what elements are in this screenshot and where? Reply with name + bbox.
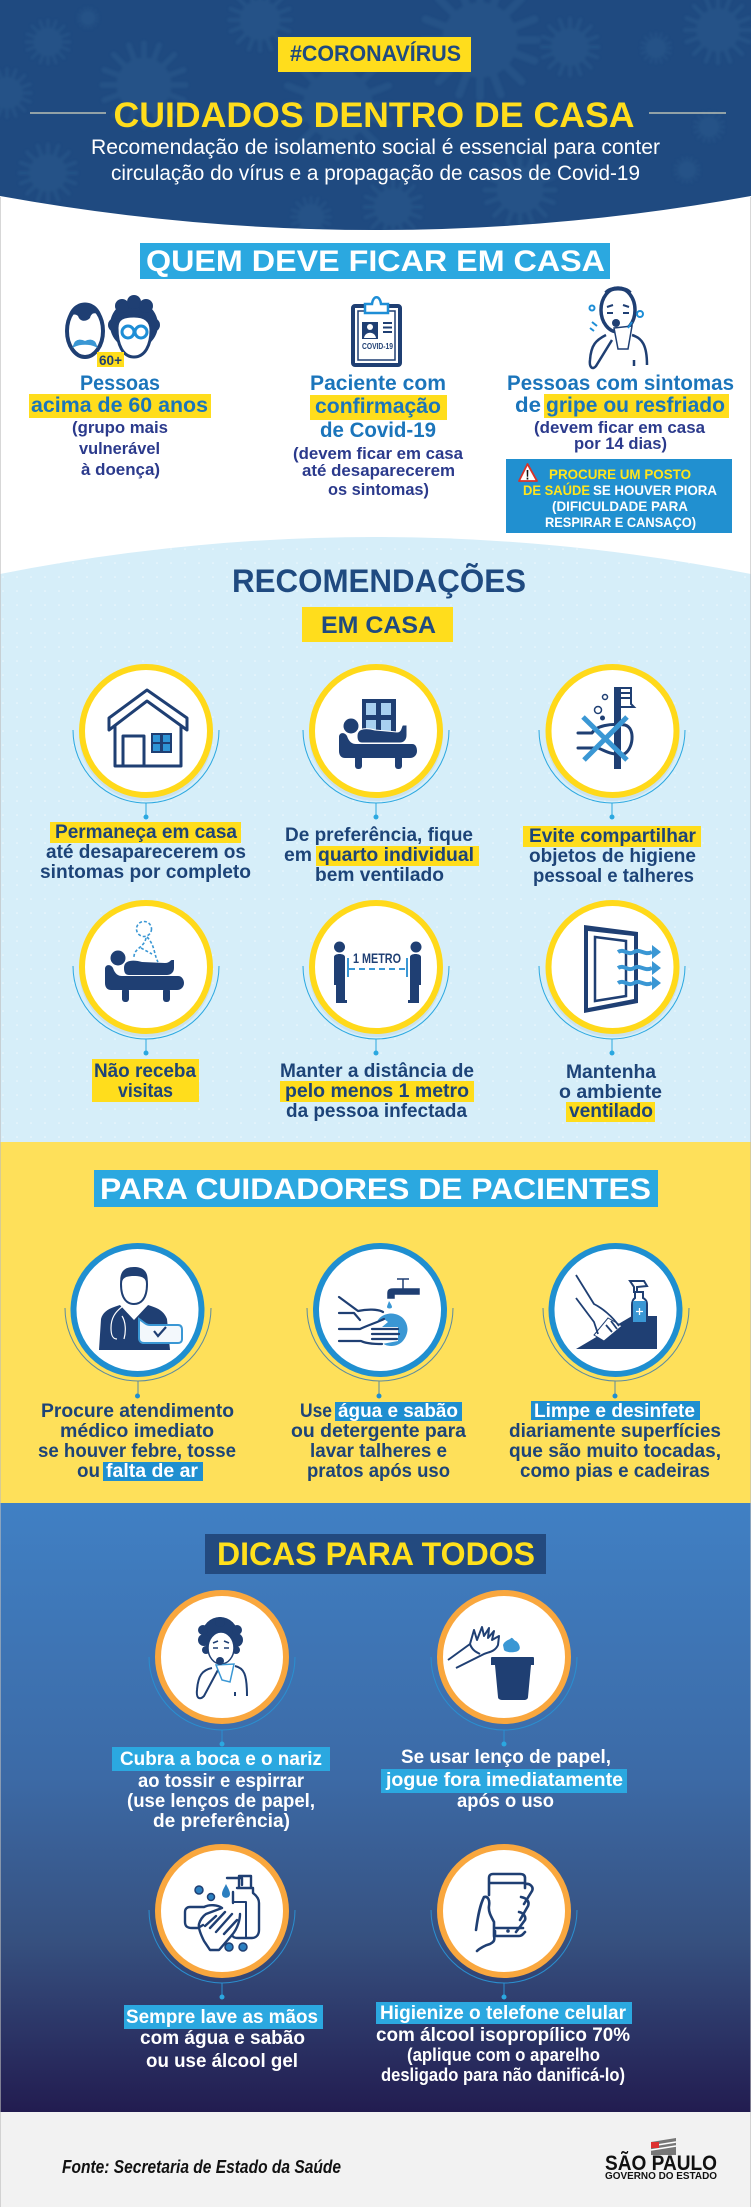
text: pratos após uso	[307, 1461, 450, 1482]
text block: (grupo mais	[72, 418, 168, 437]
text block	[507, 372, 734, 453]
text: pessoal e talheres	[533, 866, 694, 887]
item: evite compartilhar	[523, 667, 701, 887]
text: jogue fora imediatamente	[385, 1770, 623, 1791]
text block: Pessoas com sintomas	[507, 372, 734, 395]
item: lave as mãos	[124, 1847, 323, 2072]
text: como pias e cadeiras	[520, 1461, 710, 1482]
item: cubra a boca	[112, 1593, 330, 1832]
text	[284, 825, 479, 886]
text	[376, 2002, 632, 2085]
text: visitas	[118, 1081, 173, 1102]
text: bem ventilado	[315, 865, 444, 886]
text: médico imediato	[60, 1421, 214, 1442]
icon: clipboard: COVID-19	[362, 342, 393, 351]
icon: cleaning surface with spray	[576, 1275, 657, 1349]
panel: paciente com confirmação	[293, 297, 464, 499]
header banner	[0, 0, 751, 237]
text	[509, 1401, 721, 1482]
text block: de	[515, 394, 541, 417]
text: ou use álcool gel	[146, 2051, 298, 2072]
text: da pessoa infectada	[286, 1101, 467, 1122]
heading: em casa: EM CASA	[321, 612, 436, 639]
item: água e sabão	[291, 1246, 466, 1482]
text: Limpe e desinfete	[534, 1401, 695, 1422]
item: telefone celular	[376, 1847, 632, 2085]
item: não receba visitas	[73, 903, 219, 1102]
text: com água e sabão	[140, 2028, 305, 2049]
panel: pessoas com sintomas	[506, 288, 734, 533]
text: com álcool isopropílico 70%	[376, 2025, 630, 2046]
source note: Fonte: Secretaria de Estado da Saúde	[62, 2157, 341, 2177]
callout: warning: !	[526, 466, 530, 482]
text block: os sintomas)	[328, 480, 429, 499]
icon: toothbrush crossed out	[578, 687, 634, 769]
item: atendimento médico	[38, 1246, 236, 1482]
text	[124, 2005, 323, 2072]
text: sintomas por completo	[40, 862, 251, 883]
text: se houver febre, tosse	[38, 1441, 236, 1462]
heading: DICAS PARA TODOS	[217, 1536, 535, 1572]
text: até desaparecerem os	[46, 842, 246, 863]
icon: hand washing	[339, 1279, 419, 1346]
subtitle: Recomendação de isolamento social é essencial para conter	[91, 135, 660, 159]
text: Evite compartilhar	[529, 826, 697, 847]
text: de preferência)	[153, 1811, 290, 1832]
text	[381, 1747, 627, 1812]
item: permaneça em casa	[40, 667, 251, 883]
panel: para cuidadores de pacientes	[0, 1142, 751, 1503]
panel: recomendações em casa	[0, 537, 751, 1142]
text	[559, 1062, 662, 1122]
callout: warning: PROCURE UM POSTO	[549, 466, 691, 482]
text block: Paciente com	[310, 372, 446, 395]
item: limpe e desinfete	[509, 1246, 721, 1482]
icon: two people one metre apart: 1 METRO	[353, 950, 401, 966]
icon: hands and soap dispenser	[185, 1876, 259, 1951]
callout: warning: SE HOUVER PIORA	[593, 482, 717, 498]
panel: dicas para todos	[0, 1503, 751, 2112]
text: Manter a distância de	[280, 1061, 474, 1082]
text: em	[284, 845, 312, 866]
icon: hand holding phone	[476, 1874, 533, 1951]
text	[92, 1059, 199, 1102]
text	[523, 826, 701, 887]
text block: até desaparecerem	[302, 461, 455, 480]
text: diariamente superfícies	[509, 1421, 721, 1442]
text: que são muito tocadas,	[509, 1441, 721, 1462]
text	[280, 1061, 474, 1122]
footer	[0, 2112, 751, 2207]
text: De preferência, fique	[285, 825, 473, 846]
icon: bed by window	[339, 699, 417, 769]
text: Mantenha	[566, 1062, 656, 1083]
text block: confirmação	[315, 395, 441, 418]
icon: woman covering mouth	[197, 1617, 247, 1698]
text	[291, 1401, 466, 1482]
text: pelo menos 1 metro	[285, 1081, 469, 1102]
callout: warning: DE SAÚDE	[523, 481, 590, 498]
text: (aplique com o aparelho	[407, 2045, 600, 2065]
icon: sneezing person	[590, 288, 647, 368]
text: Não receba	[94, 1061, 196, 1082]
text: o ambiente	[559, 1082, 662, 1103]
text: objetos de higiene	[529, 846, 696, 867]
logo: governo de são paulo	[605, 2138, 717, 2182]
text block: vulnerável	[79, 439, 160, 458]
text: ou	[77, 1461, 100, 1482]
icon: elderly couple: 60+	[99, 352, 122, 368]
text: Permaneça em casa	[55, 822, 237, 843]
heading: quem deve ficar em casa: QUEM DEVE FICAR EM CASA	[146, 245, 605, 278]
callout: warning	[506, 459, 732, 533]
text: ao tossir e espirrar	[138, 1771, 305, 1792]
text: (use lenços de papel,	[127, 1791, 315, 1812]
callout: warning: RESPIRAR E CANSAÇO)	[545, 514, 696, 530]
text block: à doença)	[81, 460, 160, 479]
text block: gripe ou resfriado	[546, 394, 725, 417]
icon: clipboard	[353, 297, 400, 365]
text: quarto individual	[318, 845, 474, 866]
item: ambiente ventilado	[539, 903, 685, 1122]
icon: elderly couple	[67, 295, 160, 368]
hashtag	[278, 37, 471, 72]
heading: recomendações: RECOMENDAÇÕES	[232, 563, 526, 599]
text	[40, 822, 251, 883]
text: lavar talheres e	[310, 1441, 447, 1462]
heading: em casa	[302, 607, 453, 642]
text block: por 14 dias)	[574, 434, 667, 453]
heading: PARA CUIDADORES DE PACIENTES	[100, 1173, 651, 1206]
logo: governo de são paulo: SÃO PAULO	[605, 2152, 717, 2175]
icon: bed with dashed visitor	[105, 922, 184, 1002]
text block: de Covid-19	[320, 419, 436, 442]
logo: governo de são paulo: GOVERNO DO ESTADO	[605, 2171, 717, 2182]
text: Sempre lave as mãos	[126, 2007, 318, 2028]
text: após o uso	[457, 1791, 554, 1812]
subtitle	[91, 135, 660, 185]
subtitle: circulação do vírus e a propagação de casos de Covid-19	[111, 161, 640, 185]
text: água e sabão	[338, 1401, 458, 1422]
text: desligado para não danificá-lo)	[381, 2065, 625, 2085]
text block: Pessoas	[80, 372, 160, 395]
icon: house	[109, 690, 187, 766]
text	[112, 1747, 330, 1832]
text: Se usar lenço de papel,	[401, 1747, 611, 1768]
icon: doctor	[99, 1267, 182, 1350]
panel: pessoas acima de 60 anos	[29, 295, 211, 479]
icon: two people one metre apart	[334, 942, 422, 1003]
title: CUIDADOS DENTRO DE CASA	[114, 96, 634, 135]
text block	[293, 372, 464, 499]
callout: warning: (DIFICULDADE PARA	[552, 498, 688, 514]
text: Cubra a boca e o nariz	[120, 1749, 322, 1770]
item: lenço de papel	[381, 1593, 627, 1812]
text block	[29, 372, 211, 479]
text	[38, 1401, 236, 1482]
hashtag: #CORONAVÍRUS	[290, 41, 461, 66]
text: Higienize o telefone celular	[380, 2003, 627, 2024]
text: Use	[300, 1401, 332, 1422]
text: ventilado	[569, 1101, 653, 1122]
icon: hand and trash bin	[448, 1627, 534, 1700]
text: Procure atendimento	[41, 1401, 234, 1422]
icon: open window with air arrows	[584, 925, 661, 1013]
item: distância de 1 metro	[280, 903, 474, 1122]
item: quarto individual	[284, 667, 479, 886]
text block: acima de 60 anos	[31, 394, 208, 417]
text block: (devem ficar em casa	[534, 418, 706, 437]
text block: (devem ficar em casa	[293, 444, 464, 463]
text: ou detergente para	[291, 1421, 466, 1442]
text: falta de ar	[106, 1461, 199, 1482]
